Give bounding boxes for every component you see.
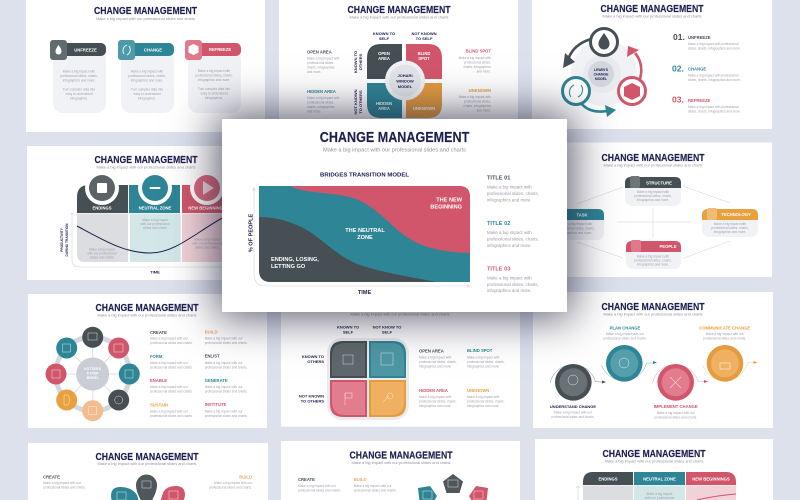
left descriptions: and more. xyxy=(307,110,321,114)
table: stages: ENDINGS xyxy=(92,206,112,210)
column: refreeze: Turn complex data into xyxy=(198,87,230,91)
list: steps: UNFREEZE xyxy=(688,35,711,40)
list: steps right: professional slides and charts. xyxy=(205,366,248,370)
left descriptions: professional slides, xyxy=(307,61,334,65)
axis label: people: % OF PEOPLE xyxy=(248,213,254,252)
left descriptions: Make a big impact with xyxy=(307,56,340,60)
step: implement change: Make a big impact with our xyxy=(657,411,696,415)
box: technology: professional slides, charts, xyxy=(711,226,749,230)
subtitle: table: Make a big impact with our professional slides and charts xyxy=(604,460,704,464)
table: stages: slides and charts xyxy=(143,226,167,230)
row labels: NOT KNOWN xyxy=(353,89,358,115)
heading: Johari: CHANGE MANAGEMENT xyxy=(348,4,451,16)
step: communicate change: Make a big impact with our xyxy=(706,332,745,336)
left descriptions xyxy=(307,50,340,114)
legend: title 03: professional slides, charts, xyxy=(487,282,539,287)
text block: hidden area: professional slides, charts, xyxy=(419,400,457,404)
table: stages: with our professional xyxy=(87,252,117,256)
subtitle: process: Make a big impact with our professional slides and charts xyxy=(604,312,703,316)
text block: hidden area: Make a big impact with xyxy=(419,395,452,399)
text block: blind spot: BLIND SPOT xyxy=(467,348,493,353)
panel: change process slide xyxy=(533,292,773,428)
column: refreeze: infographics and more. xyxy=(198,78,230,82)
list: steps: slides, charts, infographics and more. xyxy=(688,78,741,82)
list: steps left: professional slides and charts. xyxy=(150,366,193,370)
list: steps: CHANGE xyxy=(688,66,706,72)
legend: title 02: professional slides, charts, xyxy=(487,236,539,242)
table: stages: NEUTRAL ZONE xyxy=(139,206,172,210)
list: steps right: Make a big impact with our xyxy=(205,336,244,340)
step: implement change: professional slides and charts. xyxy=(654,416,697,420)
text block: blind spot xyxy=(467,348,505,368)
subtitle: petals: Make a big impact with our professional slides and charts xyxy=(98,462,197,466)
line chart: productivity curve xyxy=(77,217,224,253)
column: refreeze: Make a big impact with xyxy=(198,69,230,73)
left descriptions: Make a big impact with xyxy=(307,96,340,100)
matrix: four quadrants: BLIND xyxy=(418,51,430,56)
list: steps: slides, charts, infographics and more. xyxy=(688,110,741,114)
text: build: Make a big impact with our xyxy=(354,484,393,488)
legend: title 02: infographics and more. xyxy=(487,243,532,248)
list: steps right: professional slides and charts. xyxy=(205,414,248,418)
cycle diagram: CHANGE xyxy=(594,72,609,76)
cycle diagram: LEWIN'S xyxy=(594,68,609,72)
legend: title 01 xyxy=(487,176,539,202)
panel: stages table slide xyxy=(535,439,773,500)
column: refreeze: professional slides, charts, xyxy=(195,74,233,78)
list: steps left: professional slides and charts. xyxy=(150,341,193,345)
table: stages: with our professional xyxy=(192,242,222,246)
list: steps: 01. xyxy=(673,32,685,42)
right descriptions: and more. xyxy=(477,108,491,112)
step: plan change xyxy=(602,326,657,382)
matrix: four quadrants: HIDDEN xyxy=(376,101,392,106)
box: technology: Make a big impact with xyxy=(714,222,746,226)
list: steps left: Make a big impact with our xyxy=(150,361,189,365)
table: stages xyxy=(77,171,242,262)
text: build: BUILD xyxy=(354,477,366,482)
left descriptions: HIDDEN AREA xyxy=(307,89,336,94)
subtitle: Kotter: Make a big impact with our professional slides and charts xyxy=(98,314,197,318)
text: build xyxy=(354,477,397,492)
list: steps right: Make a big impact with our xyxy=(205,410,244,414)
text: create xyxy=(43,474,86,490)
subtitle: timeline: Make a big impact with our professional slides and charts xyxy=(96,166,196,170)
step: understand change: Make a big impact with our xyxy=(554,410,593,414)
legend: title 02: Make a big impact with xyxy=(487,230,532,235)
text block: unknown: infographics and more. xyxy=(467,404,500,408)
legend: title 03: infographics and more. xyxy=(487,288,532,293)
legend: title 02 xyxy=(487,221,539,248)
matrix: quadrants xyxy=(327,338,409,420)
list: steps right: INSTITUTE xyxy=(205,402,227,407)
wheel diagram xyxy=(46,327,140,421)
area label: new beginning: BEGINNING xyxy=(430,204,462,210)
column labels: NOT KNOWN xyxy=(411,31,437,36)
list: steps left: CREATE xyxy=(150,330,167,335)
list: steps right: Make a big impact with our xyxy=(205,361,244,365)
panel: Johari window slide xyxy=(279,0,518,125)
step: communicate change: professional slides and charts. xyxy=(703,336,746,340)
row labels: OTHERS xyxy=(358,53,363,70)
list: steps: 02. xyxy=(672,64,684,74)
axis label: productivity: DURING TRANSITION xyxy=(65,223,69,256)
column labels: SELF xyxy=(382,330,393,334)
axis label: productivity xyxy=(60,223,69,256)
area label: neutral zone: THE NEUTRAL xyxy=(345,228,385,234)
text: create: professional slides and charts. xyxy=(43,486,86,490)
matrix: four quadrants: MODEL xyxy=(398,84,413,89)
legend: title 03 xyxy=(487,266,539,293)
list: steps left: professional slides and charts. xyxy=(150,414,193,418)
area chart: three stages xyxy=(259,186,470,282)
step: understand change: UNDERSTAND CHANGE xyxy=(550,404,596,409)
column: refreeze: infographics. xyxy=(205,96,223,100)
area label: ending: ENDING, LOSING, xyxy=(271,257,319,263)
subtitle: Johari: Make a big impact with our professional slides and charts xyxy=(350,16,449,20)
box: structure: professional slides, charts, xyxy=(634,194,672,198)
area label: ending: LETTING GO xyxy=(271,264,306,270)
text: create xyxy=(298,477,341,492)
list: steps xyxy=(672,32,741,114)
box: structure: infographics and more. xyxy=(637,198,669,202)
box: task: infographics and more. xyxy=(560,231,592,235)
subtitle: organisation: Make a big impact with our professional slides and charts xyxy=(604,164,703,168)
heading: organisation: CHANGE MANAGEMENT xyxy=(602,152,705,164)
text block: open area: infographics and more. xyxy=(419,364,452,368)
text block: open area xyxy=(419,348,457,368)
text: build: Make a big impact with our xyxy=(214,481,253,485)
panel: transition timeline slide xyxy=(27,146,257,280)
right descriptions: BLIND SPOT xyxy=(466,48,491,54)
box: technology: infographics and more. xyxy=(714,230,746,234)
chart title: BRIDGES TRANSITION MODEL xyxy=(320,172,410,178)
text block: open area: Make a big impact with xyxy=(419,356,452,360)
table: stages: slides and charts xyxy=(90,256,114,260)
box: structure xyxy=(625,176,681,206)
legend: title 01: professional slides, charts, xyxy=(487,191,539,196)
column labels: NOT KNOW TO xyxy=(373,324,401,330)
matrix: four quadrants: AREA xyxy=(378,56,390,61)
row labels: OTHERS xyxy=(307,359,324,364)
step: plan change: PLAN CHANGE xyxy=(610,326,641,330)
table: stages: NEW BEGINNINGS xyxy=(692,476,730,482)
row labels xyxy=(299,354,324,404)
list: steps left xyxy=(150,330,193,418)
list: steps left: Make a big impact with our xyxy=(150,385,189,389)
table: stages xyxy=(576,472,736,500)
list: steps: slides, charts, infographics and more. xyxy=(688,46,741,50)
panel: freeze model slide xyxy=(26,0,265,132)
box: technology xyxy=(702,208,758,237)
heading: pentagons: CHANGE MANAGEMENT xyxy=(350,450,453,462)
legend: title 01: infographics and more. xyxy=(487,198,532,202)
box: people xyxy=(626,240,681,269)
box: people: PEOPLE xyxy=(660,244,677,249)
text: create: Make a big impact with our xyxy=(43,481,82,485)
matrix: four quadrants: SPOT xyxy=(418,56,430,61)
column: change: CHANGE xyxy=(144,48,162,52)
text: create: Make a big impact with our xyxy=(298,484,337,488)
column: unfreeze xyxy=(50,40,106,113)
heading: change management: CHANGE MANAGEMENT xyxy=(320,130,469,146)
axis label: time: TIME xyxy=(150,270,160,274)
column: unfreeze: infographics. xyxy=(70,96,88,100)
column labels: KNOWN TO xyxy=(337,324,359,330)
column: refreeze: REFREEZE xyxy=(209,47,231,52)
column labels: KNOWN TO xyxy=(373,31,395,36)
axis label: time: TIME xyxy=(358,290,371,296)
box: structure: STRUCTURE xyxy=(646,180,672,186)
table: stages: slides and charts xyxy=(195,246,219,250)
text block: blind spot: professional slides, charts, xyxy=(467,360,505,364)
right descriptions: Make a big impact with xyxy=(459,95,491,99)
list: steps right: professional slides and charts. xyxy=(205,341,248,345)
column: refreeze: easy to understand xyxy=(200,92,228,96)
box: people: Make a big impact with xyxy=(637,254,669,258)
right descriptions: UNKNOWN xyxy=(469,88,491,93)
wheel diagram: 8 STEP xyxy=(87,372,99,376)
table: stages: Make a big impact xyxy=(142,218,168,222)
row labels: TO OTHERS xyxy=(358,90,363,114)
panel: petal model slide xyxy=(28,443,268,500)
column: change: Turn complex data into xyxy=(131,88,163,92)
cycle diagram: MODEL xyxy=(595,77,607,81)
axis label: productivity: PRODUCTIVITY xyxy=(60,227,64,252)
column: unfreeze: infographics and more. xyxy=(63,78,95,82)
panel: pentagon model slide xyxy=(281,441,520,500)
box: task xyxy=(548,209,604,240)
heading: table: CHANGE MANAGEMENT xyxy=(602,448,706,460)
legend: title 01: Make a big impact with xyxy=(487,184,532,190)
list: steps: Make a big impact with professional xyxy=(688,105,739,109)
heading: timeline: CHANGE MANAGEMENT xyxy=(94,154,198,166)
text: create: professional slides and charts. xyxy=(298,488,341,492)
area label: ending xyxy=(271,257,319,270)
box: people: professional slides, charts, xyxy=(634,258,672,262)
area label: neutral zone: ZONE xyxy=(357,235,373,241)
text block: hidden area: infographics and more. xyxy=(419,404,452,408)
column: change: infographics and more. xyxy=(131,78,163,82)
right descriptions: charts, infographics xyxy=(463,104,491,108)
heading: petals: CHANGE MANAGEMENT xyxy=(96,451,199,463)
area label: new beginning: THE NEW xyxy=(436,198,463,204)
text block: unknown xyxy=(467,388,505,408)
panel: Kotter 8 step slide xyxy=(28,294,267,428)
row labels: TO OTHERS xyxy=(301,398,324,404)
list: steps left: ENABLE xyxy=(150,378,167,383)
subtitle: awareness matrix: Make a big impact with our professional slides and charts xyxy=(350,312,450,316)
table: stages: Make a big impact xyxy=(194,238,220,242)
table: stages: with our professional xyxy=(140,222,170,226)
table: stages: Make a big impact xyxy=(89,248,115,252)
left descriptions: charts, infographics xyxy=(307,105,335,109)
text: build xyxy=(209,474,253,490)
row labels: KNOWN TO xyxy=(302,354,324,359)
right descriptions: professional slides, xyxy=(464,100,491,104)
list: steps left: FORM xyxy=(150,354,163,359)
right descriptions: and more. xyxy=(477,70,491,74)
subtitle: pentagons: Make a big impact with our professional slides and charts xyxy=(352,461,451,465)
legend: title 03: TITLE 03 xyxy=(487,266,510,272)
text block: open area: OPEN AREA xyxy=(419,348,444,354)
step: understand change xyxy=(550,364,606,419)
list: steps right: Make a big impact with our xyxy=(205,385,244,389)
column: change: professional slides, charts, xyxy=(128,74,166,78)
list: steps left: Make a big impact with our xyxy=(150,336,189,340)
column labels xyxy=(373,31,437,41)
box: people: infographics and more. xyxy=(637,262,669,266)
legend: title 02: TITLE 02 xyxy=(487,221,510,227)
matrix: four quadrants: AREA xyxy=(378,106,390,111)
list: steps left: SUSTAIN xyxy=(150,402,168,408)
matrix: four quadrants: JOHARI xyxy=(397,73,413,78)
text block: unknown: UNKNOWN xyxy=(467,388,489,393)
left descriptions: professional slides, xyxy=(307,100,334,104)
table: stages: with our professional xyxy=(645,496,674,500)
table: stages: NEW BEGINNINGS xyxy=(188,206,226,210)
matrix: four quadrants: WINDOW xyxy=(396,78,414,84)
panel: Bridges transition model xyxy=(222,119,566,312)
box: task: Make a big impact with xyxy=(560,222,592,226)
text: build: professional slides and charts. xyxy=(209,486,252,490)
table: stages: Make a big impact xyxy=(647,492,673,496)
step: communicate change xyxy=(699,326,758,382)
wheel diagram: KOTTER'S xyxy=(84,367,102,371)
step: communicate change: COMMUNICATE CHANGE xyxy=(699,326,750,330)
panel: organisation model slide xyxy=(545,142,772,277)
text block: unknown: professional slides, charts, xyxy=(467,400,505,404)
column labels: TO SELF xyxy=(416,36,433,41)
row labels xyxy=(353,51,363,115)
list: steps left: professional slides and charts. xyxy=(150,390,193,394)
left descriptions: and more. xyxy=(307,70,321,74)
legend: title 01: TITLE 01 xyxy=(487,176,510,182)
left descriptions: charts, infographics xyxy=(307,66,335,70)
row labels: NOT KNOWN xyxy=(299,394,324,398)
column: change: infographics. xyxy=(138,96,156,100)
column: unfreeze: Make a big impact with xyxy=(63,70,95,74)
axes xyxy=(70,213,225,267)
box: task: professional slides, charts, xyxy=(557,226,595,230)
heading: Kotter: CHANGE MANAGEMENT xyxy=(96,302,199,314)
step: implement change: IMPLEMENT CHANGE xyxy=(654,404,698,409)
heading: Lewin: CHANGE MANAGEMENT xyxy=(600,3,704,15)
list: steps right xyxy=(205,330,248,418)
heading: process: CHANGE MANAGEMENT xyxy=(602,301,705,313)
column labels: SELF xyxy=(343,330,354,334)
column: unfreeze: Turn complex data into xyxy=(63,88,95,92)
petals xyxy=(111,474,185,500)
text: build: professional slides and charts. xyxy=(354,488,397,492)
list: steps right: ENLIST xyxy=(205,354,220,358)
column: change: easy to understand xyxy=(133,92,161,96)
left descriptions: OPEN AREA xyxy=(307,50,332,54)
wheel diagram: MODEL xyxy=(87,376,99,380)
matrix: four quadrants xyxy=(367,44,442,118)
right descriptions: charts, infographics xyxy=(463,65,491,69)
column: unfreeze: professional slides, charts, xyxy=(60,74,98,78)
legend: title 03: Make a big impact with xyxy=(487,276,532,280)
list: steps: REFREEZE xyxy=(688,98,711,103)
text block: hidden area: HIDDEN AREA xyxy=(419,388,448,393)
right descriptions: professional slides, xyxy=(464,60,491,64)
column labels xyxy=(337,324,401,334)
column: refreeze xyxy=(185,40,241,113)
panel: Lewin's change model slide xyxy=(532,0,772,129)
panel: awareness matrix slide xyxy=(281,300,520,427)
text block: hidden area xyxy=(419,388,457,408)
arrows between boxes xyxy=(577,186,730,258)
column: change: Make a big impact with xyxy=(131,70,163,74)
text block: blind spot: Make a big impact with xyxy=(467,356,500,360)
list: steps left: Make a big impact with our xyxy=(150,410,189,414)
list: steps: Make a big impact with professional xyxy=(688,42,739,46)
list: steps right: professional slides and charts. xyxy=(205,390,248,394)
text block: unknown: Make a big impact with xyxy=(467,395,500,399)
step: plan change: professional slides and charts. xyxy=(604,336,647,340)
subtitle: Lewin: Make a big impact with our professional slides and charts xyxy=(602,14,702,18)
list: steps right: BUILD xyxy=(205,330,217,334)
axes xyxy=(252,188,470,288)
text: build: BUILD xyxy=(239,474,252,480)
area label: new beginning xyxy=(430,198,463,210)
table: stages: NEUTRAL ZONE xyxy=(643,476,676,482)
subtitle: freeze model: Make a big impact with our professional slides and charts xyxy=(96,17,195,21)
row labels: KNOWN TO xyxy=(353,51,358,73)
box: task: TASK xyxy=(576,212,588,218)
heading: freeze model: CHANGE MANAGEMENT xyxy=(94,5,197,17)
column: unfreeze: UNFREEZE xyxy=(74,48,97,52)
column: change xyxy=(118,40,174,113)
column: unfreeze: easy to understand xyxy=(65,92,93,96)
box: structure: Make a big impact with xyxy=(637,190,669,194)
text: create: CREATE xyxy=(298,477,315,482)
text block: blind spot: infographics and more. xyxy=(467,364,500,368)
matrix: four quadrants: UNKNOWN xyxy=(413,106,435,111)
subtitle: Make a big impact with our professional slides and charts xyxy=(323,148,466,154)
column labels: SELF xyxy=(379,36,390,41)
text block: open area: professional slides, charts, xyxy=(419,360,457,364)
area label: neutral zone xyxy=(345,228,385,241)
table: stages: ENDINGS xyxy=(598,476,618,482)
list: steps: Make a big impact with professional xyxy=(688,74,739,78)
cycle diagram xyxy=(562,28,646,117)
list: steps right: GENERATE xyxy=(205,378,228,383)
pentagons xyxy=(418,474,488,500)
matrix: four quadrants: OPEN xyxy=(378,51,390,56)
step: plan change: Make a big impact with our xyxy=(606,332,645,336)
text: create: CREATE xyxy=(43,474,60,480)
list: steps: 03. xyxy=(672,94,684,104)
step: understand change: professional slides and charts. xyxy=(552,415,595,419)
box: technology: TECHNOLOGY xyxy=(721,212,751,217)
right descriptions xyxy=(459,48,491,112)
step: implement change xyxy=(652,364,708,420)
right descriptions: Make a big impact with xyxy=(459,56,491,60)
